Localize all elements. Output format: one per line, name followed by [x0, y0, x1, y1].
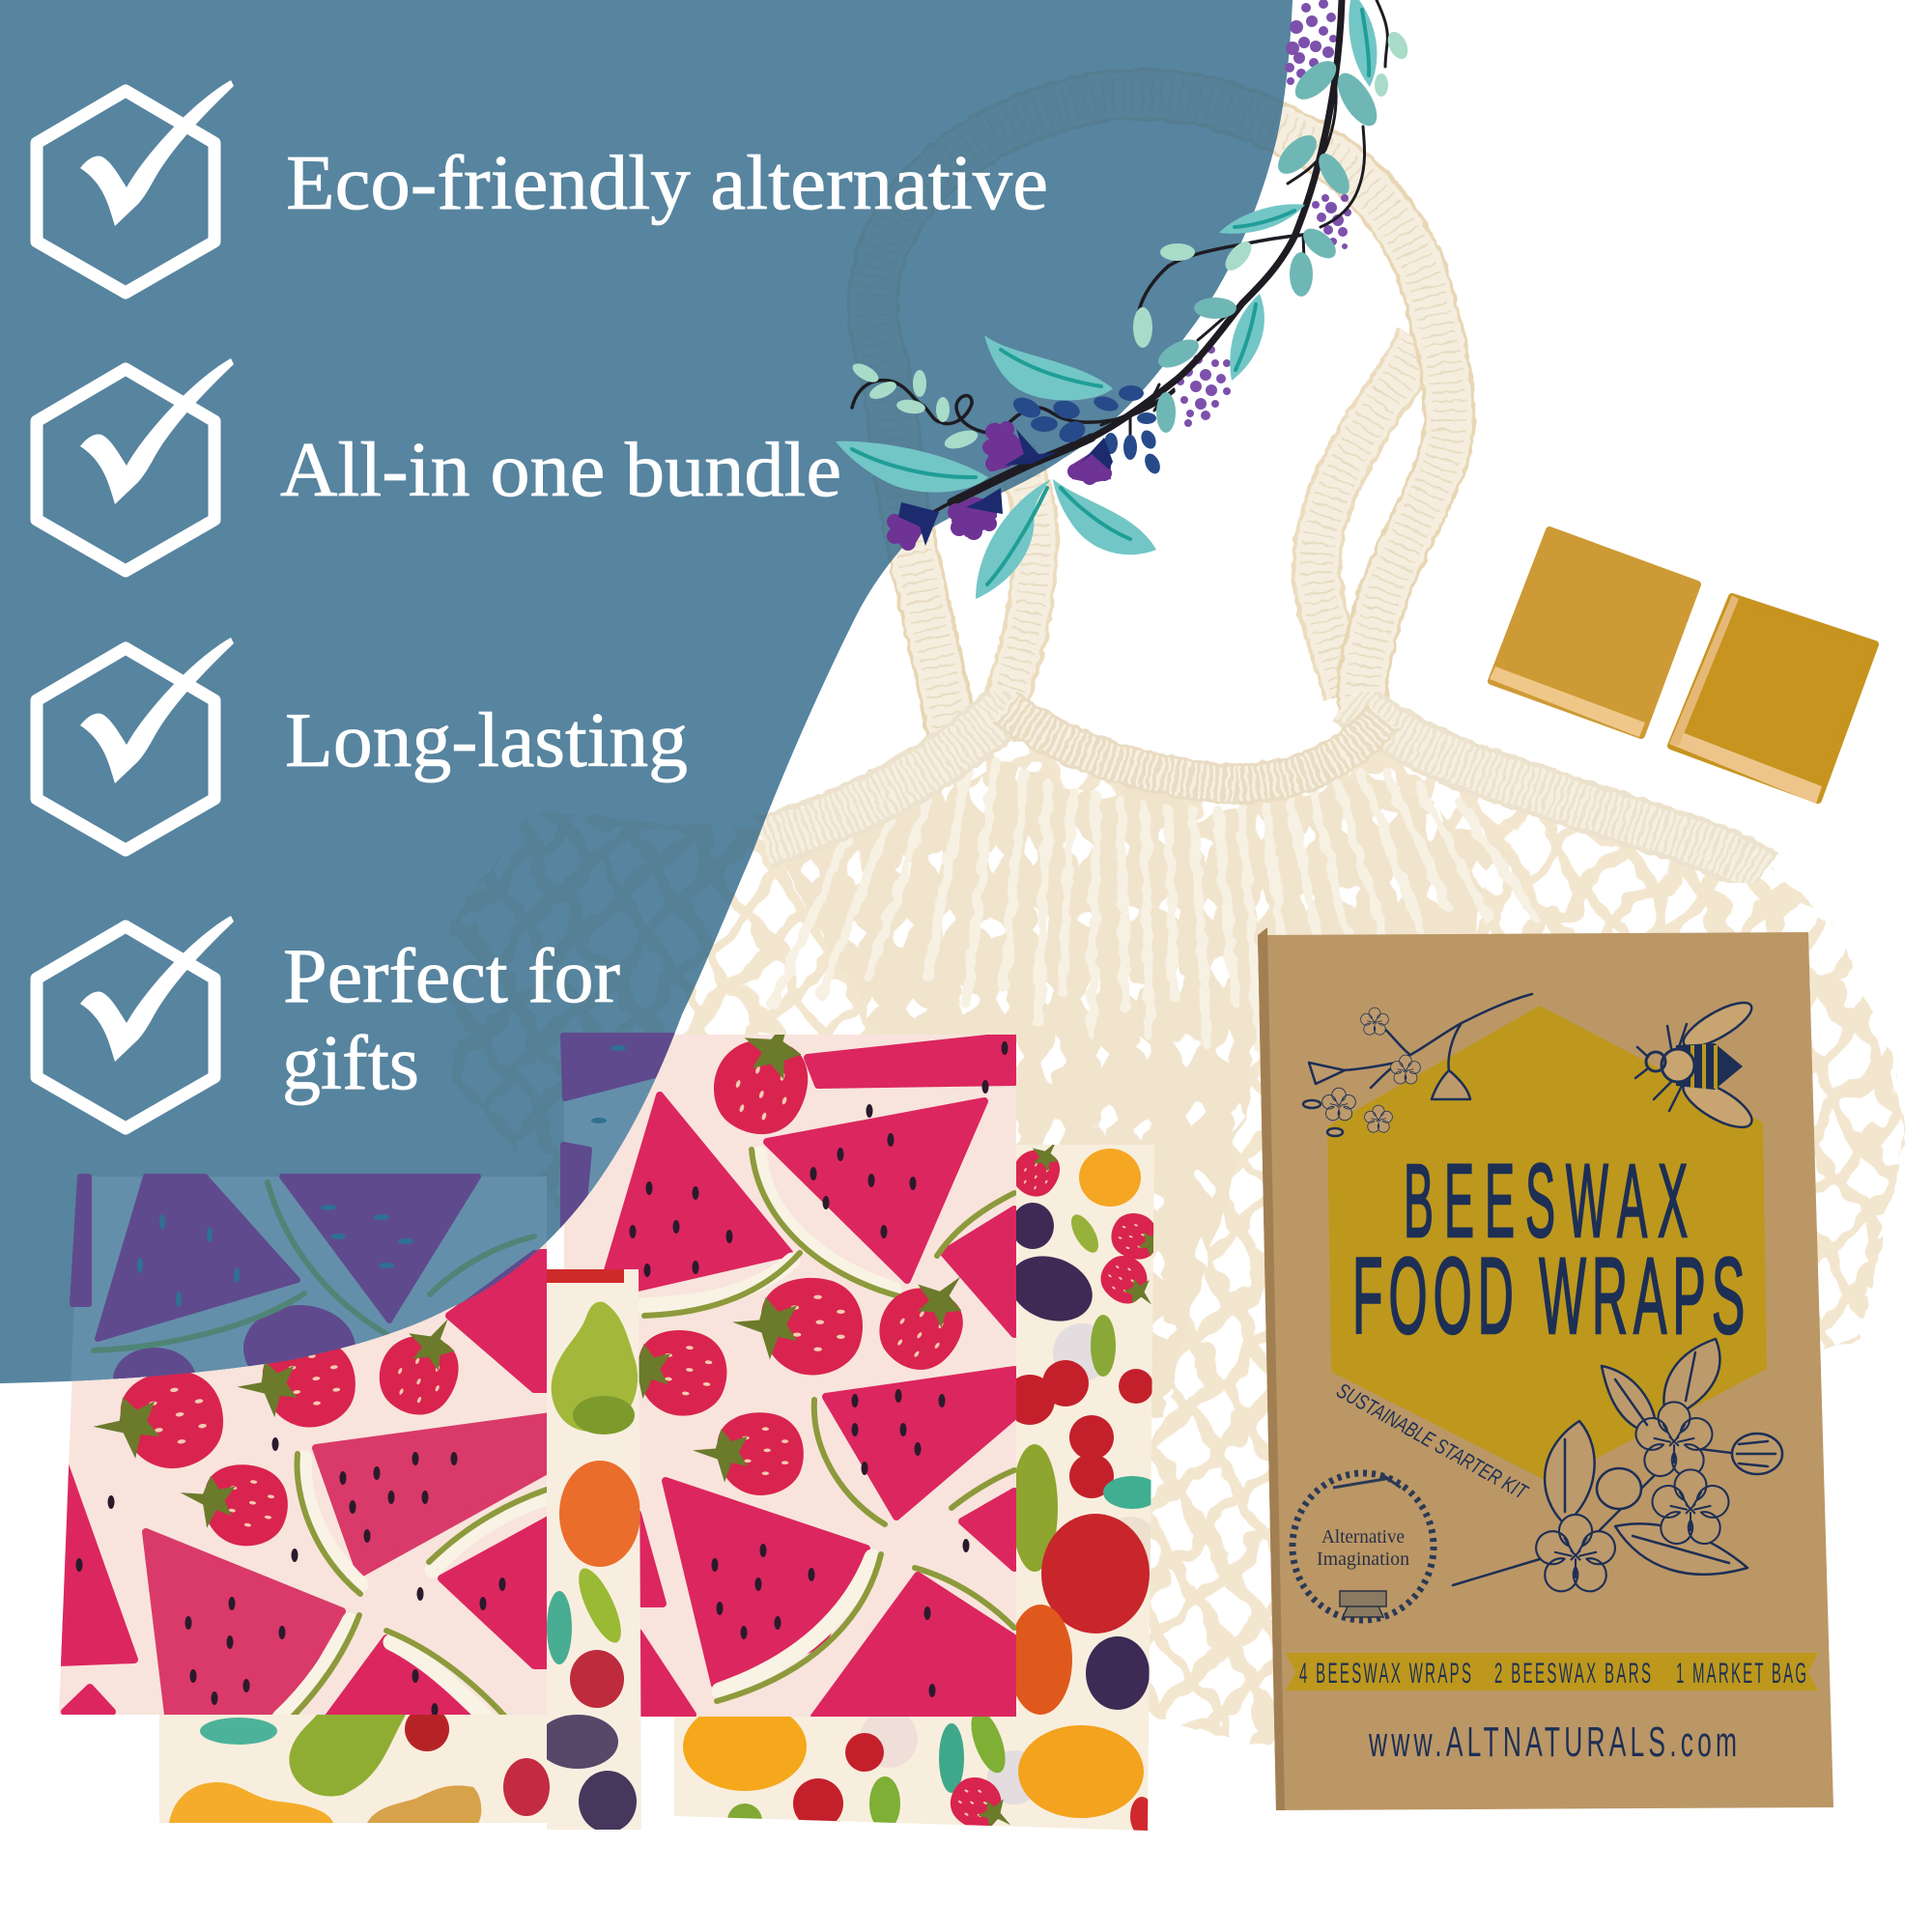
contents ribbon — [1286, 1653, 1818, 1690]
branch decoration — [836, 0, 1411, 599]
logo: Alternative Imagination — [1293, 1473, 1434, 1620]
watermelon wrap: centre — [564, 1000, 1018, 1720]
contents ribbon: 2 BEESWAX BARS — [1494, 1659, 1651, 1690]
item: eco-friendly — [37, 80, 1048, 293]
box title: BEESWAX — [1404, 1143, 1688, 1259]
box side flap — [1258, 927, 1285, 1810]
item: eco-friendly: Eco-friendly alternative — [286, 139, 1048, 226]
logo: Alternative Imagination: Alternative — [1321, 1526, 1405, 1548]
contents ribbon: 4 BEESWAX WRAPS — [1299, 1659, 1471, 1690]
item: bundle — [37, 358, 841, 571]
benefit list — [37, 80, 1048, 1128]
icon: hexagon check — [37, 916, 234, 1128]
icon: hexagon check — [37, 358, 234, 571]
box title: FOOD WRAPS — [1352, 1236, 1745, 1356]
product box — [1258, 927, 1833, 1810]
blue berries — [1010, 385, 1163, 476]
box title — [1352, 1143, 1745, 1356]
purple flowers — [887, 421, 1113, 551]
wraps seen through blue panel — [70, 1033, 675, 1381]
grey-teal leaves — [1154, 54, 1384, 433]
upper loop handle — [873, 94, 1449, 744]
icon: hexagon check — [37, 80, 234, 293]
icon: hexagon check — [37, 638, 234, 850]
item: gifts: gifts — [282, 1019, 419, 1106]
blue curved panel — [0, 0, 1293, 1383]
bar one — [1490, 530, 1697, 737]
fruit strip wrap — [547, 1269, 641, 1830]
contents ribbon: 1 MARKET BAG — [1676, 1659, 1806, 1690]
shoulder bands and collar — [763, 700, 1763, 874]
beeswax bars — [1490, 530, 1875, 804]
mint leaves — [850, 29, 1411, 452]
item: bundle: All-in one bundle — [280, 426, 841, 513]
item: gifts: Perfect for — [283, 932, 620, 1019]
fringe strands — [773, 763, 1536, 1048]
watermelon wrap: left — [59, 1242, 547, 1715]
net body — [449, 720, 1905, 1748]
fruit wrap: back left — [159, 1715, 547, 1823]
icon: top branch — [1303, 994, 1532, 1136]
fruit wrap: back right — [667, 1129, 1178, 1844]
item: long-lasting: Long-lasting — [285, 696, 688, 783]
teal feather leaves — [836, 0, 1377, 599]
logo: Alternative Imagination: Imagination — [1317, 1548, 1409, 1570]
stems — [852, 0, 1387, 536]
website: www.ALTNATURALS.com — [1368, 1718, 1737, 1766]
bar two — [1669, 595, 1875, 804]
inner straps — [995, 338, 1420, 734]
market bag — [449, 94, 1905, 1748]
yellow hexagon — [1327, 1006, 1767, 1483]
icon: blossom branch — [1453, 1339, 1782, 1591]
kraft box body — [1258, 932, 1833, 1810]
tagline: SUSTAINABLE STARTER KIT — [1333, 1378, 1532, 1505]
item: long-lasting — [37, 638, 688, 850]
purple dot clusters — [1177, 0, 1351, 427]
icon: bee — [1635, 995, 1758, 1136]
item: gifts — [37, 916, 620, 1128]
